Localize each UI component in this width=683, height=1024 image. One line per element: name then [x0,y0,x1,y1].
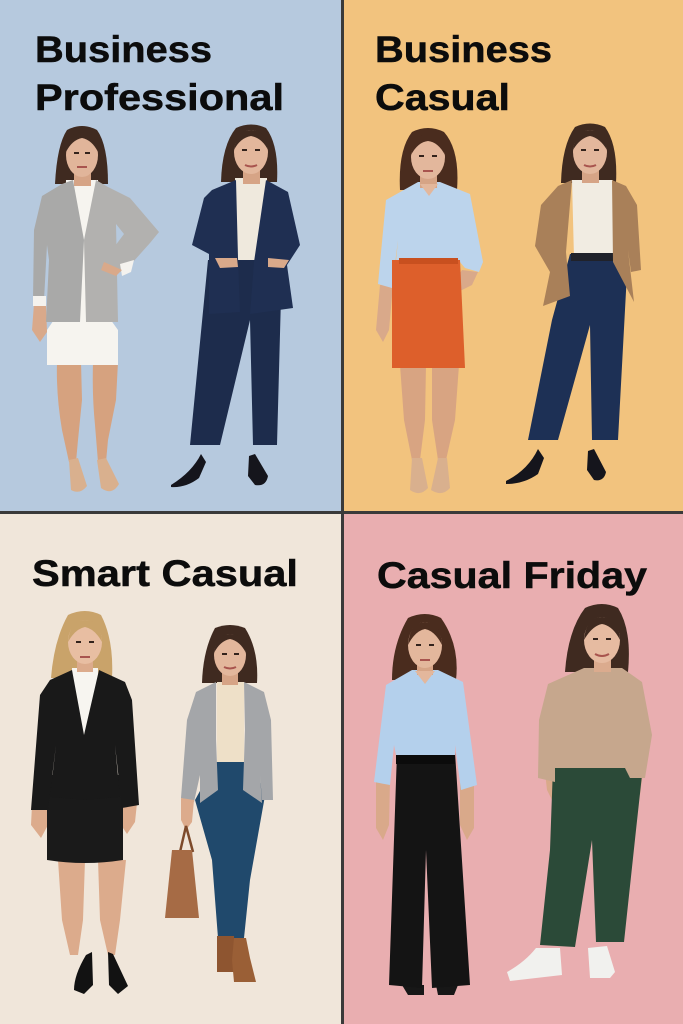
heading: Business Casual: Business [375,29,552,70]
figure: black blazer and skirt [31,611,139,994]
figure: blue shirt and wide black trousers [374,614,477,995]
panel: Casual Friday [344,514,683,1024]
heading: Business Casual: Casual [375,77,510,118]
figure: tan blazer and navy trousers [506,124,641,484]
panel: Business Casual [344,0,683,511]
heading: Business Professional: Professional [35,77,284,118]
figure: grey blazer, jeans and brown bag [165,625,273,982]
heading: Business Professional: Business [35,29,212,70]
panel: Smart Casual [0,514,341,1024]
heading: Casual Friday: Casual Friday [377,555,647,596]
panel: Business Professional [0,0,341,511]
heading: Smart Casual: Smart Casual [32,553,298,594]
figure: blue shirt and orange skirt [376,128,483,493]
heading: Business Casual [375,29,552,118]
figure: grey blazer and white skirt [32,126,159,492]
heading: Business Professional [35,29,284,118]
figure: navy suit [171,124,300,487]
figure: beige sweater and green trousers [507,604,652,981]
icon: brown handbag [165,826,199,918]
